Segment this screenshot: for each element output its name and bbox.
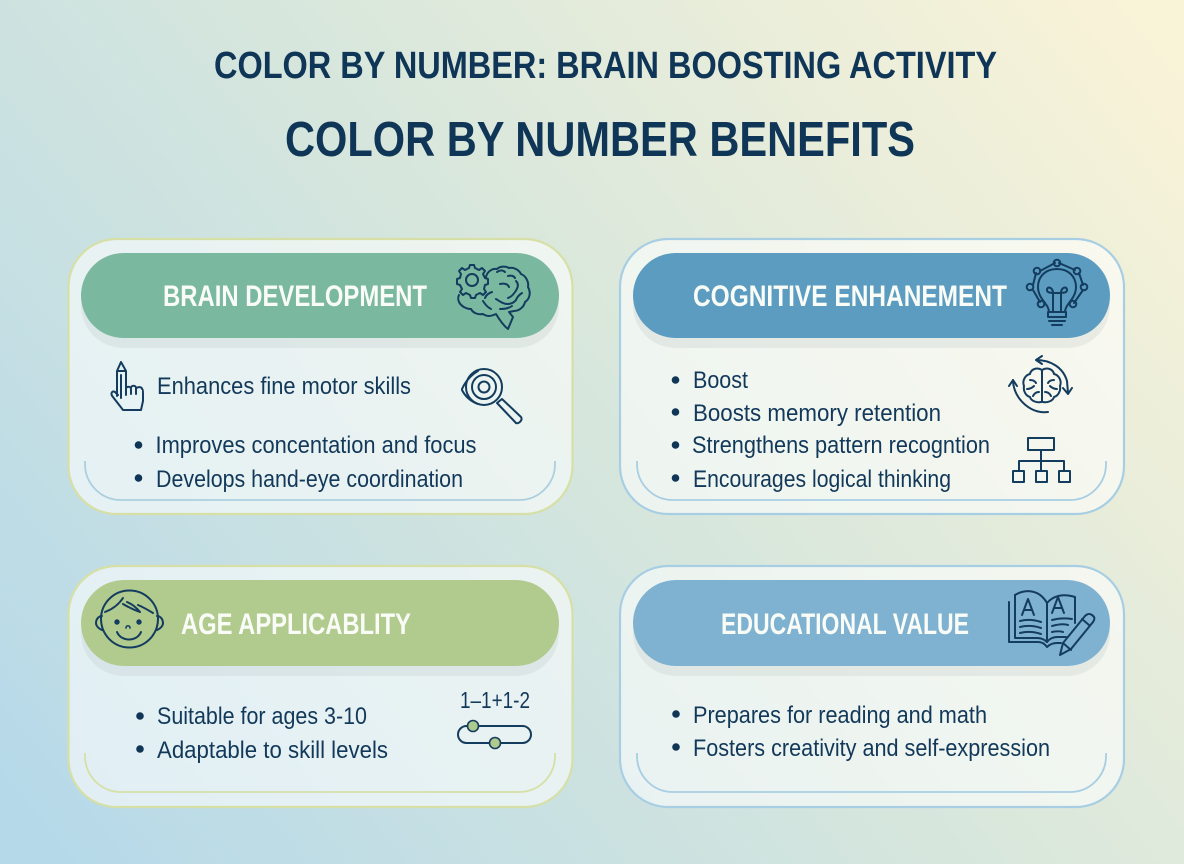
bullet list: age applicability: Adaptable to skill levels	[157, 737, 388, 764]
icon: open book and pencil	[1009, 591, 1094, 655]
panel: brain development	[68, 239, 572, 514]
icon: hand with pencil	[112, 362, 143, 410]
header: age applicability: AGE APPLICABLITY	[181, 608, 411, 641]
icon: brain with cycle arrows	[1009, 356, 1072, 412]
bullet list: brain development: Enhances fine motor skills	[157, 373, 411, 400]
panel: cognitive enhancement	[620, 239, 1124, 514]
bullet list: cognitive enhancement	[672, 367, 990, 493]
panel: educational value	[620, 566, 1124, 807]
panel: age applicability	[68, 566, 572, 807]
bullet list: cognitive enhancement: Boosts memory retention	[693, 400, 941, 427]
bullet list: brain development: Develops hand-eye coordination	[156, 466, 463, 493]
bullet list: cognitive enhancement: Boost	[693, 367, 748, 394]
icon: number slider: 1–1+1-2	[460, 687, 530, 713]
bullet list: brain development	[135, 373, 476, 493]
icon: number slider	[458, 687, 531, 748]
icon: brain with gear	[457, 265, 530, 329]
title: COLOR BY NUMBER: BRAIN BOOSTING ACTIVITY	[214, 45, 997, 87]
bullet list: educational value: Prepares for reading and math	[693, 702, 987, 729]
header: age applicability	[81, 580, 559, 676]
bullet list: age applicability: Suitable for ages 3-10	[157, 703, 367, 730]
icon: light bulb network	[1027, 260, 1087, 325]
header: cognitive enhancement	[633, 253, 1110, 348]
icon: hierarchy chart	[1013, 438, 1070, 482]
icon: eye and magnifier	[462, 369, 522, 423]
header: educational value	[633, 580, 1110, 676]
bullet list: cognitive enhancement: Strengthens pattern recogntion	[692, 432, 990, 459]
bullet list: age applicability	[136, 703, 388, 764]
header: educational value: EDUCATIONAL VALUE	[721, 608, 969, 641]
subtitle: COLOR BY NUMBER BENEFITS	[285, 113, 915, 167]
header: cognitive enhancement: COGNITIVE ENHANEMENT	[693, 280, 1007, 313]
icon: child face	[96, 590, 163, 648]
bullet list: educational value	[672, 702, 1050, 762]
bullet list: educational value: Fosters creativity and self-expression	[693, 735, 1050, 762]
header: brain development: BRAIN DEVELOPMENT	[163, 280, 427, 313]
header: brain development	[81, 253, 559, 348]
bullet list: brain development: Improves concentation and focus	[156, 432, 476, 459]
bullet list: cognitive enhancement: Encourages logical thinking	[693, 466, 951, 493]
